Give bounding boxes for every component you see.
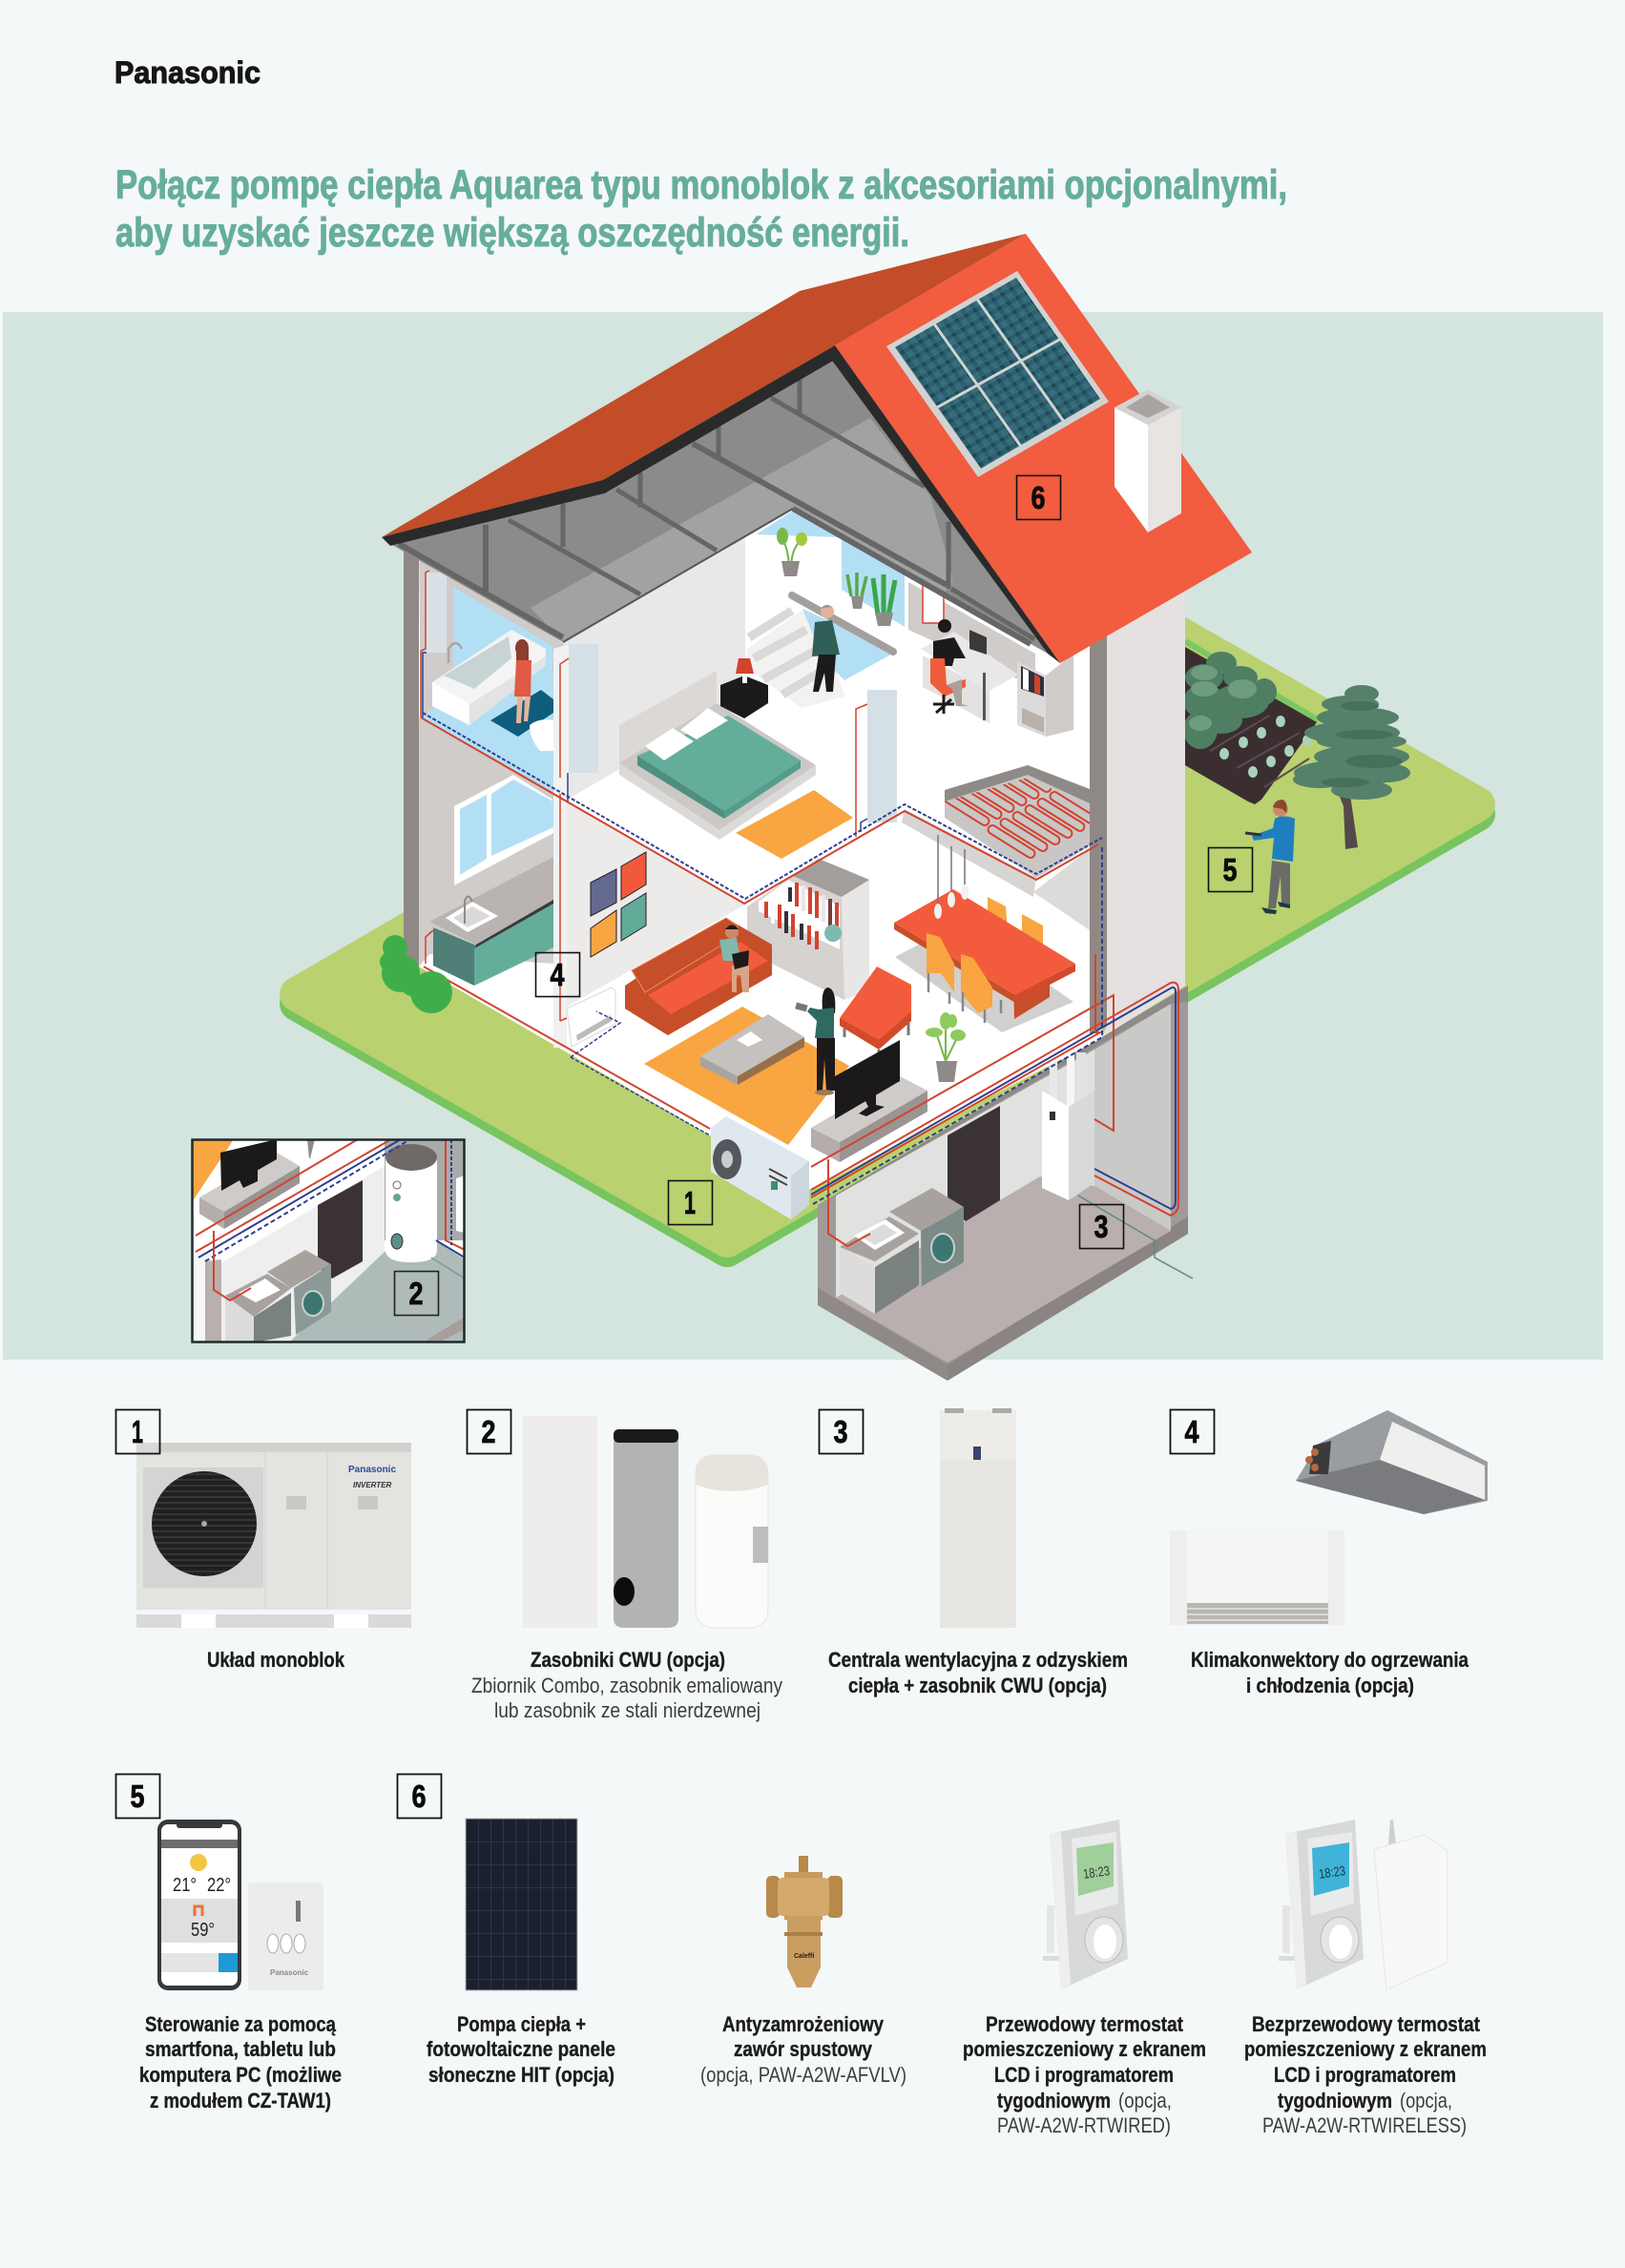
caption wired thermostat: LCD i programatorem bbox=[994, 2063, 1174, 2087]
caption wired thermostat: Przewodowy termostat bbox=[986, 2012, 1184, 2036]
product: wired thermostat: 18:23 bbox=[1082, 1862, 1111, 1882]
room: kitchen bbox=[419, 718, 553, 986]
chimney bbox=[1115, 389, 1181, 532]
person on sofa bbox=[719, 926, 749, 992]
woman in bathroom bbox=[514, 639, 531, 723]
badge 4 bbox=[536, 952, 580, 996]
badge 1 bbox=[668, 1181, 712, 1225]
caption 2: Zbiornik Combo, zasobnik emaliowany bbox=[471, 1674, 782, 1697]
caption 3: Centrala wentylacyjna z odzyskiem bbox=[828, 1648, 1128, 1672]
product: wired thermostat bbox=[1043, 1820, 1128, 1989]
badge 6: 6 bbox=[1031, 480, 1046, 515]
kitchen cabinet and sink bbox=[429, 857, 553, 986]
product 1: monoblock outdoor unit bbox=[136, 1443, 411, 1628]
product 1: monoblock outdoor unit: Panasonic bbox=[348, 1465, 396, 1475]
caption 4: i chłodzenia (opcja) bbox=[1246, 1674, 1414, 1697]
inset: tank variant bbox=[192, 1139, 465, 1342]
caption wireless thermostat: Bezprzewodowy termostat bbox=[1252, 2012, 1481, 2036]
badge 2: 2 bbox=[408, 1276, 424, 1311]
caption 4: Klimakonwektory do ogrzewania bbox=[1191, 1648, 1469, 1672]
badge 3 bbox=[819, 1410, 863, 1454]
badge 3 bbox=[1080, 1204, 1124, 1248]
bathtub bbox=[432, 630, 546, 725]
right corner wall bbox=[1090, 563, 1185, 1037]
caption 6: słoneczne HIT (opcja) bbox=[428, 2063, 615, 2087]
man at desk bbox=[930, 619, 969, 714]
upper floor: stairs and man walking bbox=[747, 595, 896, 708]
caption 3: ciepła + zasobnik CWU (opcja) bbox=[848, 1674, 1107, 1697]
caption 3 bbox=[828, 1648, 1128, 1697]
coffee table bbox=[700, 1014, 804, 1085]
badge 4: 4 bbox=[1185, 1414, 1199, 1449]
basement cutaway bbox=[818, 986, 1193, 1381]
caption 5: Sterowanie za pomocą bbox=[145, 2012, 337, 2036]
roof underside bbox=[390, 360, 1048, 654]
caption wireless thermostat bbox=[1244, 2012, 1487, 2137]
captions row 1 bbox=[207, 1648, 1469, 1722]
product 5: phone and control module: 21° bbox=[173, 1875, 197, 1896]
potted plant bbox=[926, 1012, 966, 1082]
caption wired thermostat bbox=[963, 2012, 1206, 2137]
upper floor: partition wall with radiator bbox=[553, 536, 745, 801]
scene badges bbox=[536, 475, 1252, 1248]
title: Połącz pompę ciepła Aquarea typu monoblok z akcesoriami opcjonalnymi, bbox=[115, 162, 1287, 208]
woman standing bbox=[795, 988, 835, 1095]
caption 5: komputera PC (możliwe bbox=[139, 2063, 342, 2087]
armchair bbox=[840, 967, 911, 1059]
fan coil on ground floor bbox=[567, 988, 615, 1047]
bookcase bbox=[747, 859, 869, 1000]
caption 6: fotowoltaiczne panele bbox=[427, 2037, 615, 2061]
caption 5 bbox=[139, 2012, 342, 2112]
product 6: solar module bbox=[466, 1819, 577, 1990]
badge 1 bbox=[116, 1410, 160, 1454]
badge 6 bbox=[397, 1775, 441, 1819]
badge 2: 2 bbox=[481, 1414, 496, 1449]
badge 5 bbox=[116, 1775, 160, 1819]
product 5: phone and control module: 22° bbox=[207, 1875, 231, 1896]
upper floor: study with desk bbox=[908, 582, 1073, 737]
inset water tank bbox=[385, 1144, 437, 1262]
product: antifreeze valve bbox=[766, 1856, 843, 1987]
product: wireless thermostat and receiver bbox=[1279, 1820, 1448, 1989]
inset washing machine bbox=[267, 1250, 331, 1335]
title: aby uzyskać jeszcze większą oszczędność energii. bbox=[115, 210, 909, 256]
badge 6 bbox=[1017, 475, 1061, 519]
toilet bbox=[530, 719, 553, 751]
TV unit bbox=[811, 1040, 927, 1162]
badge 4: 4 bbox=[550, 957, 565, 992]
room: bathroom bbox=[419, 551, 564, 801]
caption valve: (opcja, PAW-A2W-AFVLV) bbox=[700, 2063, 906, 2087]
man walking bbox=[812, 605, 840, 692]
badge 3: 3 bbox=[1094, 1209, 1109, 1244]
caption 2 bbox=[471, 1648, 782, 1722]
tree bbox=[1293, 685, 1410, 849]
left corner wall bbox=[404, 544, 419, 967]
person with tablet bbox=[1245, 800, 1295, 914]
product 1: monoblock outdoor unit: INVERTER bbox=[353, 1481, 392, 1489]
lawn bbox=[297, 558, 1478, 1250]
title bbox=[115, 162, 1287, 256]
badge 4 bbox=[1170, 1410, 1214, 1454]
inset door bbox=[318, 1180, 363, 1279]
caption 1: Układ monoblok bbox=[207, 1648, 345, 1672]
house interior base bbox=[419, 509, 1102, 1190]
roof bbox=[382, 234, 1252, 663]
product 5: phone and control module bbox=[157, 1820, 323, 1990]
solar panels bbox=[886, 271, 1109, 477]
caption wireless thermostat: pomieszczeniowy z ekranem bbox=[1244, 2037, 1487, 2061]
living room rug bbox=[644, 1007, 849, 1145]
upper floor: rear window and plants bbox=[745, 510, 905, 630]
basement door bbox=[948, 1106, 1000, 1221]
product: antifreeze valve: Caleffi bbox=[794, 1953, 814, 1960]
pendant lamps bbox=[934, 835, 969, 919]
basement sink cabinet bbox=[840, 1217, 919, 1314]
ground floor rear wall band bbox=[902, 809, 1090, 930]
panel: house scene background bbox=[3, 312, 1603, 1360]
caption 6: Pompa ciepła + bbox=[457, 2012, 586, 2036]
caption wireless thermostat: LCD i programatorem bbox=[1274, 2063, 1456, 2087]
badge 2 bbox=[468, 1410, 511, 1454]
caption wired thermostat: (opcja, bbox=[1118, 2089, 1172, 2112]
badge 1: 1 bbox=[132, 1414, 143, 1449]
upper floor edge pipes bbox=[421, 713, 1102, 1021]
badge 1: 1 bbox=[684, 1185, 696, 1220]
caption 5: smartfona, tabletu lub bbox=[145, 2037, 336, 2061]
caption wired thermostat: pomieszczeniowy z ekranem bbox=[963, 2037, 1206, 2061]
bath mat bbox=[490, 690, 553, 737]
eaves bbox=[382, 345, 1060, 663]
kitchen window bbox=[454, 775, 553, 885]
garden: vegetable bed and bushes bbox=[1183, 641, 1319, 804]
inset sink cabinet bbox=[225, 1274, 291, 1342]
shelf with books bbox=[1017, 661, 1046, 737]
floor console bbox=[1170, 1530, 1344, 1625]
caption wireless thermostat: tygodniowym bbox=[1278, 2089, 1392, 2112]
logo: Panasonic: Panasonic bbox=[115, 55, 260, 90]
outdoor unit in scene bbox=[711, 1116, 809, 1219]
left bushes bbox=[380, 935, 452, 1013]
dining set bbox=[894, 835, 1075, 1032]
product: wireless thermostat and receiver: 18:23 bbox=[1318, 1862, 1346, 1882]
roof right slope bbox=[835, 234, 1252, 663]
caption 5: z modułem CZ-TAW1) bbox=[150, 2089, 331, 2112]
radiator bedroom bbox=[856, 690, 897, 837]
caption 2: lub zasobnik ze stali nierdzewnej bbox=[494, 1698, 760, 1722]
upper floor: bedroom bbox=[619, 658, 897, 859]
ventilation unit in basement bbox=[1042, 1052, 1094, 1200]
caption valve bbox=[700, 2012, 906, 2087]
product 3: ventilation unit bbox=[940, 1408, 1016, 1628]
caption 4 bbox=[1191, 1648, 1469, 1697]
sofa bbox=[625, 918, 772, 1035]
product 4: fan coils bbox=[1170, 1410, 1488, 1625]
product 5: phone and control module: 59° bbox=[191, 1920, 215, 1941]
caption wireless thermostat: PAW-A2W-RTWIRELESS) bbox=[1262, 2113, 1467, 2137]
wall art bbox=[591, 852, 646, 957]
caption wired thermostat: PAW-A2W-RTWIRED) bbox=[997, 2113, 1171, 2137]
product 2: DHW tanks bbox=[523, 1416, 768, 1628]
badge 5: 5 bbox=[1223, 852, 1237, 887]
product 5: phone and control module: Panasonic bbox=[270, 1968, 309, 1977]
underfloor heating bbox=[945, 765, 1090, 878]
ducted unit bbox=[1296, 1410, 1488, 1514]
caption 6 bbox=[427, 2012, 615, 2087]
captions row 2 bbox=[139, 2012, 1487, 2137]
badge 6: 6 bbox=[412, 1779, 426, 1814]
basement washing machine bbox=[889, 1188, 964, 1286]
badge 3: 3 bbox=[834, 1414, 847, 1449]
badge 5: 5 bbox=[130, 1779, 145, 1814]
caption wired thermostat: tygodniowym bbox=[997, 2089, 1111, 2112]
badge 2 bbox=[395, 1271, 439, 1315]
caption valve: Antyzamrożeniowy bbox=[722, 2012, 885, 2036]
caption valve: zawór spustowy bbox=[734, 2037, 873, 2061]
foundation pipes bbox=[811, 844, 1178, 1246]
badge 5 bbox=[1208, 847, 1252, 891]
ground floor edge pipes bbox=[424, 967, 710, 1135]
caption wireless thermostat: (opcja, bbox=[1400, 2089, 1452, 2112]
caption 2: Zasobniki CWU (opcja) bbox=[531, 1648, 725, 1672]
nightstand and lamp bbox=[720, 658, 768, 718]
wall with framed art bbox=[553, 797, 747, 1048]
bedroom rug bbox=[736, 790, 853, 859]
